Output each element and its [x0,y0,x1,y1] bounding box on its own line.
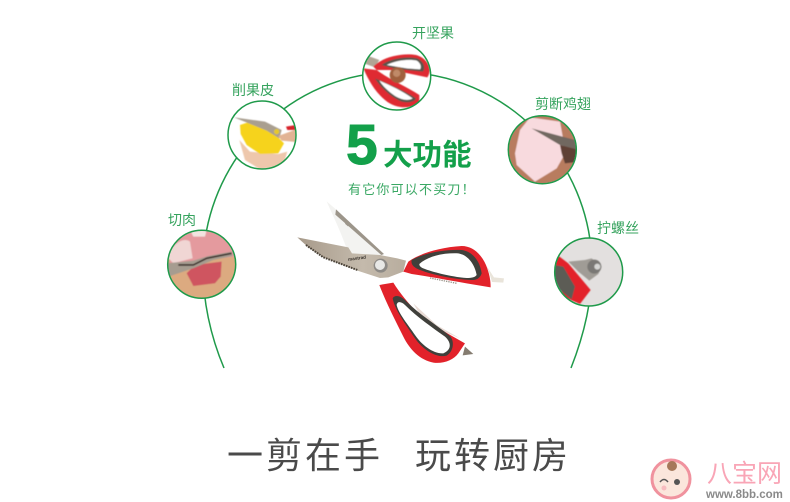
heading: 5 functions: 5 [346,113,378,177]
label: cracking nuts: 开坚果 [412,25,454,41]
serrated lower blade [297,237,406,278]
label: cutting chicken wings: 剪断鸡翅 [535,96,591,112]
bottom slogan: 一剪在手 [227,435,383,476]
heading: 5 functions [346,113,472,177]
watermark url: www.8bb.com [705,489,783,501]
lower handle [413,303,460,338]
label: cutting meat: 切肉 [168,212,196,228]
green arc connecting the function circles [203,72,592,368]
circle: turning screws [553,238,623,306]
circle: cracking nuts [363,42,431,110]
bottom slogan [227,435,571,476]
circle: cutting chicken wings [507,113,578,185]
icon: baby face [652,460,690,498]
bottom slogan: 玩转厨房 [415,435,571,476]
circle: peeling fruit [228,101,296,169]
scissors product image: mastrad [348,254,367,262]
upper white blade [327,201,384,258]
watermark logo [652,460,783,501]
label: turning screws: 拧螺丝 [597,220,639,236]
pivot screw [374,259,388,273]
infographic canvas [166,26,782,500]
scissors product image [297,201,504,363]
label: peeling fruit: 削果皮 [232,82,274,98]
heading: 5 functions: 大功能 [383,139,472,172]
circle: cutting meat [167,230,237,300]
subheading: 有它你可以不买刀！ [348,182,476,197]
watermark brand name: 八宝网 [707,460,782,488]
right handle [487,266,504,283]
